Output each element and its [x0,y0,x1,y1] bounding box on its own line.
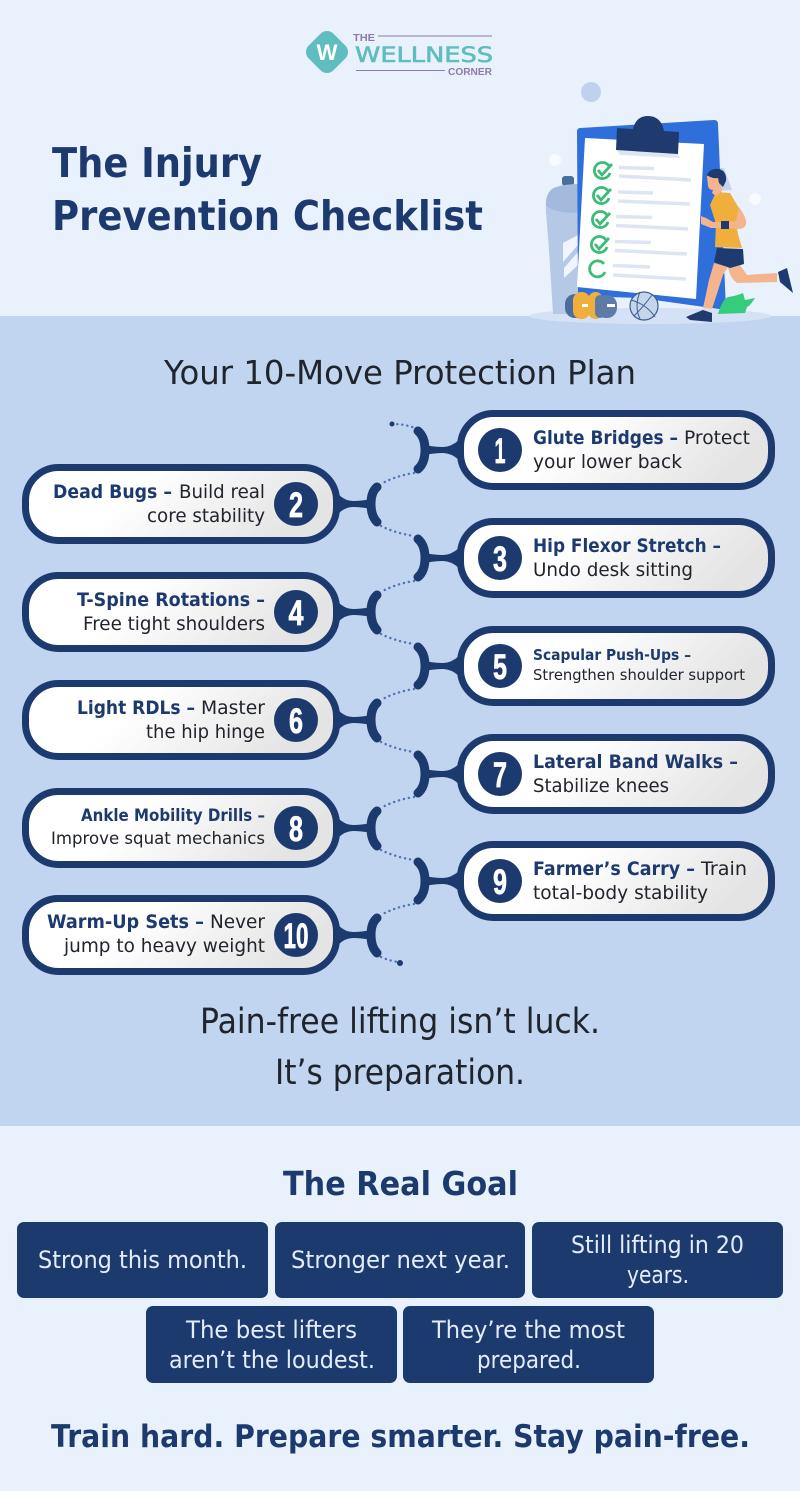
closing statement: Pain-free lifting isn’t luck. [200,1002,600,1042]
item 10: warm-up sets: Warm-Up Sets – [47,911,204,933]
item 10: warm-up sets [26,898,377,972]
illustration: clipboard and runner [529,82,793,324]
item 6: light rdls: Light RDLs – [77,697,195,719]
item 7: lateral band walks: Stabilize knees [533,775,669,797]
box: still lifting [532,1222,783,1298]
item 10: warm-up sets: 10 [284,917,308,956]
icon: runner [686,169,793,322]
closing statement [200,1002,600,1093]
item 2: dead bugs: Build real [179,481,265,503]
item 3: hip flexor stretch: 3 [493,540,507,579]
item 9: farmer's carry: 9 [493,863,507,902]
box: most prepared: prepared. [477,1346,581,1374]
title: Prevention Checklist [52,192,483,240]
logo: WELLNESS [355,43,493,67]
box: most prepared: They’re the most [431,1316,625,1344]
closing tagline: Train hard. Prepare smarter. Stay pain-free. [51,1419,750,1455]
heading: protection plan: Your 10-Move Protection Plan [163,353,636,392]
logo: CORNER [448,67,493,78]
title: The Injury [52,139,262,187]
item 1: glute bridges: Protect [684,427,750,449]
box: best lifters [146,1306,397,1383]
item 9: farmer's carry: Train [700,858,747,880]
box: strong this month [17,1222,268,1298]
item 6: light rdls: the hip hinge [146,721,265,743]
item 1: glute bridges [418,414,772,486]
item 6: light rdls [26,684,377,756]
icon: basketball [630,292,658,320]
item 1: glute bridges: 1 [494,432,506,471]
item 10: warm-up sets: jump to heavy weight [63,935,265,957]
item 8: ankle mobility drills [26,792,377,864]
item 4: t-spine rotations: 4 [288,594,304,633]
logo: W [316,40,338,65]
item 2: dead bugs [26,468,377,540]
item 8: ankle mobility drills: 8 [289,810,303,849]
item 5: scapular push-ups: Strengthen shoulder support [533,666,745,684]
logo: THE [353,32,375,44]
item 3: hip flexor stretch: Undo desk sitting [533,559,693,581]
item 5: scapular push-ups: Scapular Push-Ups – [533,646,691,664]
item 3: hip flexor stretch: Hip Flexor Stretch – [533,535,721,557]
item 4: t-spine rotations: Free tight shoulders [83,613,265,635]
title [52,139,483,240]
item 3: hip flexor stretch [418,522,772,594]
icon: dumbbell [565,292,617,319]
item 2: dead bugs: Dead Bugs – [53,481,172,503]
item 4: t-spine rotations: T-Spine Rotations – [77,589,265,611]
item 5: scapular push-ups: 5 [493,648,507,687]
closing statement: It’s preparation. [275,1053,525,1093]
icon: water bottle [546,176,582,314]
item 10: warm-up sets: Never [210,911,265,933]
box: still lifting: years. [627,1261,689,1289]
item 9: farmer's carry: Farmer’s Carry – [533,858,695,880]
icon: checklist marks [590,163,612,277]
item 7: lateral band walks: 7 [493,756,507,795]
item 6: light rdls: 6 [289,702,303,741]
box: best lifters: The best lifters [185,1316,357,1344]
item 4: t-spine rotations [26,576,377,648]
dotted connector path [381,422,415,966]
item 2: dead bugs: core stability [147,505,265,527]
panel: protection plan band [0,316,800,1126]
item 7: lateral band walks: Lateral Band Walks – [533,751,738,773]
item 6: light rdls: Master [201,697,265,719]
item 1: glute bridges: Glute Bridges – [533,427,678,449]
heading: the real goal: The Real Goal [283,1164,518,1203]
item 9: farmer's carry [418,844,772,918]
item 8: ankle mobility drills: Ankle Mobility Drills – [81,806,265,826]
item 1: glute bridges: your lower back [533,451,682,473]
logo [302,27,493,78]
icon: plant [718,293,755,314]
item 8: ankle mobility drills: Improve squat mechanics [51,829,265,849]
box: best lifters: aren’t the loudest. [169,1346,375,1374]
item 2: dead bugs: 2 [289,486,303,525]
item 9: farmer's carry: total-body stability [533,882,708,904]
box: stronger next year [275,1222,525,1298]
box: stronger next year: Stronger next year. [291,1246,510,1274]
box: strong this month: Strong this month. [38,1246,247,1274]
box: still lifting: Still lifting in 20 [571,1231,744,1259]
item 5: scapular push-ups [418,630,772,702]
box: most prepared [403,1306,654,1383]
icon: clipboard [577,116,732,310]
item 7: lateral band walks [418,738,772,810]
